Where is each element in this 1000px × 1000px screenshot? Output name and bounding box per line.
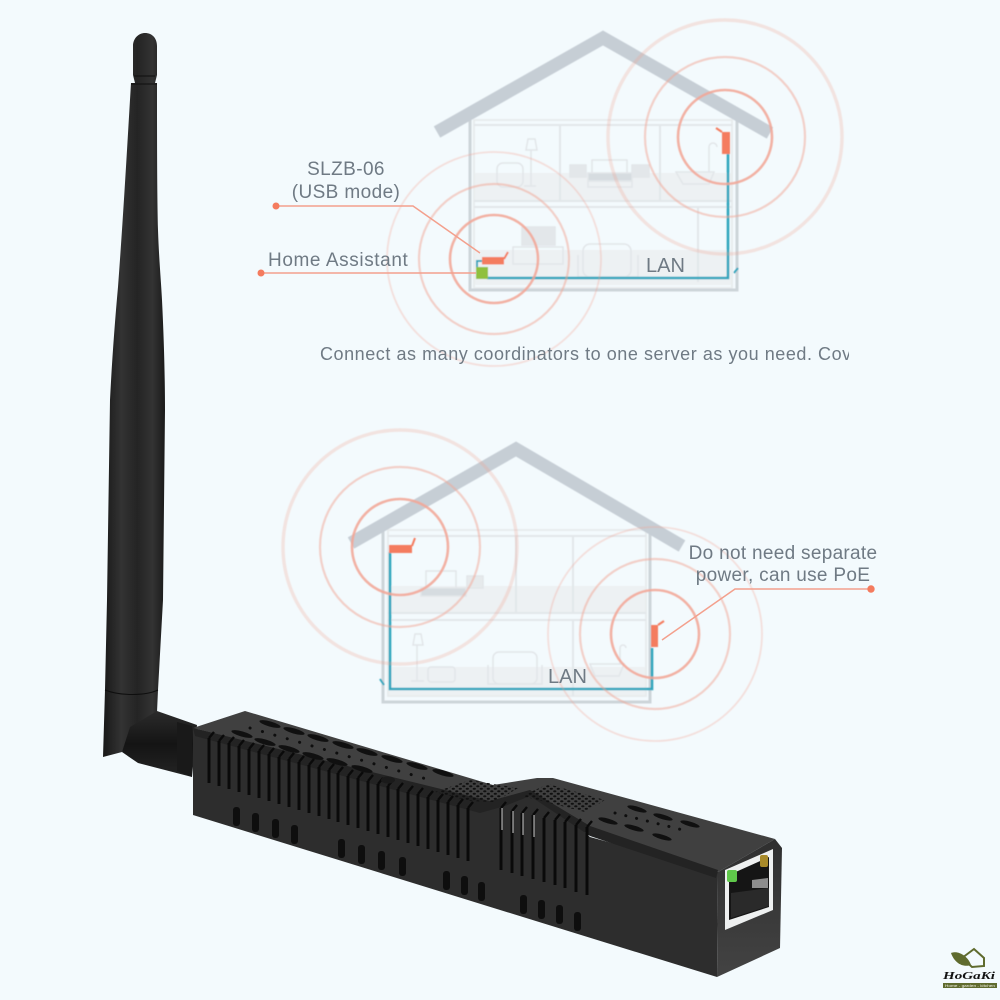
device side face (193, 728, 718, 977)
top house floor shading (474, 173, 732, 285)
top right coordinator (716, 128, 730, 154)
caption text: Connect as many coordinators to one server as you need. Cover (320, 344, 869, 364)
panel: bottom house diagram, PoE (283, 430, 762, 741)
slot teeth on chamfer (209, 732, 592, 827)
honeycomb vents (435, 780, 518, 802)
slot highlights (502, 808, 534, 837)
top house walls (470, 120, 737, 290)
top house furniture (497, 139, 717, 277)
callout: SLZB-06 USB mode (272, 159, 480, 253)
panel: top house diagram, USB mode (387, 20, 842, 366)
callout: SLZB-06 USB mode: SLZB-06 (307, 159, 385, 180)
device: SLZB-06 body (193, 711, 782, 977)
device front face (717, 839, 782, 977)
callout: SLZB-06 USB mode: (USB mode) (292, 182, 400, 203)
antenna connector (122, 711, 197, 777)
callout: Home Assistant (258, 250, 476, 276)
top right signal rings (608, 20, 842, 254)
left signal rings (387, 152, 601, 366)
downstairs coordinator (651, 621, 664, 647)
vent slots, side (209, 738, 587, 895)
label: LAN: LAN (646, 255, 685, 277)
yellow LED (760, 855, 768, 867)
label: LAN: LAN (548, 666, 587, 688)
top LAN cable (487, 153, 728, 278)
SLZB-06 coordinator (482, 252, 508, 264)
bottom house walls (383, 530, 650, 702)
top vent ovals (231, 718, 700, 842)
button (381, 776, 395, 784)
logo: HoGaKi: HoGaKi (942, 970, 996, 982)
callout: Home Assistant: Home Assistant (268, 250, 409, 271)
bottom house furniture (411, 571, 626, 684)
top vent dots (250, 728, 430, 780)
arched side windows (233, 807, 581, 931)
logo leaf and roof icon (951, 949, 984, 967)
bottom LAN cable (390, 552, 652, 689)
device top face (193, 711, 775, 872)
bottom left signal rings (283, 430, 517, 664)
logo: HoGaKi (942, 949, 997, 988)
top house roof (437, 38, 770, 133)
server device green (476, 267, 488, 279)
logo: HoGaKi: Home - garden - kitchen (945, 983, 995, 988)
antenna (103, 33, 197, 777)
bottom house roof (351, 449, 682, 546)
callout: PoE: power, can use PoE (696, 565, 870, 586)
upstairs coordinator (389, 538, 415, 553)
bottom right signal rings (548, 527, 762, 741)
antenna whip (103, 33, 165, 757)
callout: PoE (662, 543, 877, 640)
green LED (727, 870, 737, 882)
bottom house floor shading (388, 586, 646, 697)
ethernet port (725, 849, 773, 930)
callout: PoE: Do not need separate (689, 543, 877, 564)
device chamfer (193, 728, 718, 878)
